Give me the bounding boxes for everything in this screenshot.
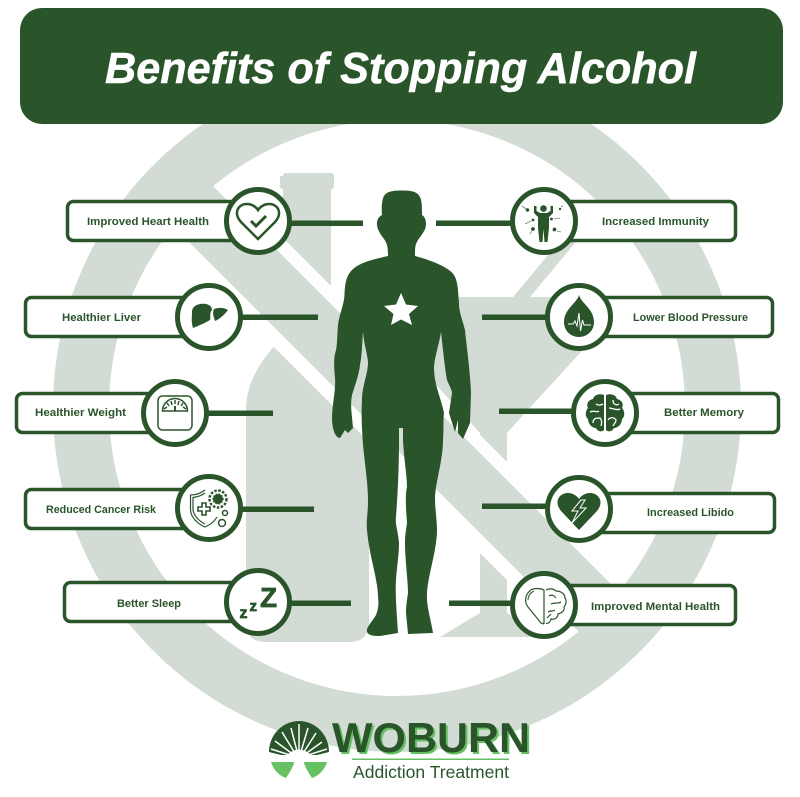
label text: Better Sleep [117, 598, 181, 610]
label text: Better Memory [664, 407, 745, 419]
title banner [20, 8, 783, 124]
connector [238, 506, 314, 512]
label pill [26, 298, 210, 336]
label pill [16, 394, 176, 432]
connector [482, 504, 552, 509]
icon: shield with cross and germs [190, 490, 228, 527]
connector [238, 314, 318, 320]
label text: Improved Heart Health [87, 216, 209, 228]
logo subtitle: Addiction Treatment [353, 762, 509, 782]
benefit: Increased Libido [482, 478, 774, 540]
label text: Lower Blood Pressure [633, 312, 748, 324]
label pill [546, 202, 736, 240]
label pill [546, 586, 736, 624]
icon: person with germs [522, 205, 563, 242]
connector [499, 408, 577, 414]
martini glass silhouette [356, 225, 631, 637]
prohibition ring [81, 92, 713, 724]
connector [288, 220, 363, 226]
icon: liver [192, 304, 228, 328]
connector [204, 410, 273, 416]
label pill [64, 582, 256, 622]
connector [436, 220, 514, 226]
icon circle [178, 476, 240, 540]
icon circle [144, 382, 206, 444]
icon: sleeping Z letters: Z [260, 582, 277, 613]
title: Benefits of Stopping Alcohol [105, 44, 697, 93]
label text: Healthier Weight [35, 407, 126, 419]
icon: heart with lightning bolt [557, 493, 601, 530]
icon circle [512, 574, 576, 636]
icon circle [226, 190, 290, 252]
background: no-alcohol symbol [54, 124, 740, 752]
label pill [26, 490, 210, 528]
connector [482, 314, 552, 320]
icon circle [548, 478, 610, 540]
benefit: Healthier Liver [26, 286, 318, 348]
icon circle [178, 286, 240, 348]
label text: Increased Immunity [602, 216, 710, 228]
human body silhouette [332, 190, 471, 636]
logo wordmark shadow: WOBURN [334, 716, 532, 763]
icon circle [574, 382, 636, 444]
icon: sleeping Z letters [240, 582, 277, 622]
logo divider line [352, 758, 509, 760]
icon: brain [586, 394, 624, 431]
benefit: Increased Immunity [436, 190, 736, 252]
benefit: Better Memory [499, 382, 778, 444]
white gap around slash [274, 240, 507, 580]
label pill [68, 202, 258, 240]
icon: blood drop with pulse [564, 295, 594, 337]
label pill [580, 298, 772, 336]
logo: Woburn Addiction Treatment [269, 714, 532, 782]
label text: Healthier Liver [62, 312, 142, 324]
benefit: Improved Heart Health [68, 190, 363, 252]
connector [288, 600, 351, 606]
benefit: Improved Mental Health [449, 574, 736, 636]
icon circle [226, 570, 290, 634]
icon: sleeping Z letters: z [250, 598, 257, 615]
logo wordmark: WOBURN [332, 714, 530, 761]
label text: Reduced Cancer Risk [46, 504, 157, 516]
icon circle [512, 190, 576, 252]
label pill [606, 394, 778, 432]
logo green leaves [271, 762, 327, 778]
label pill [580, 494, 774, 532]
prohibition slash [189, 186, 611, 632]
benefit: Healthier Weight [16, 382, 273, 444]
icon: weighing scale [158, 396, 192, 430]
star on chest [384, 293, 418, 325]
benefit: Reduced Cancer Risk [26, 476, 314, 540]
benefit: Better Sleep [64, 570, 351, 634]
label text: Improved Mental Health [591, 601, 720, 613]
connector [449, 600, 514, 606]
wine bottle silhouette [246, 173, 369, 642]
benefit: Lower Blood Pressure [482, 286, 772, 348]
icon circle [548, 286, 610, 348]
icon: half heart half brain [526, 588, 566, 624]
logo sun dome [269, 721, 329, 757]
label text: Increased Libido [647, 507, 734, 519]
icon: sleeping Z letters: z [240, 605, 248, 622]
icon: heart with check [237, 204, 279, 239]
